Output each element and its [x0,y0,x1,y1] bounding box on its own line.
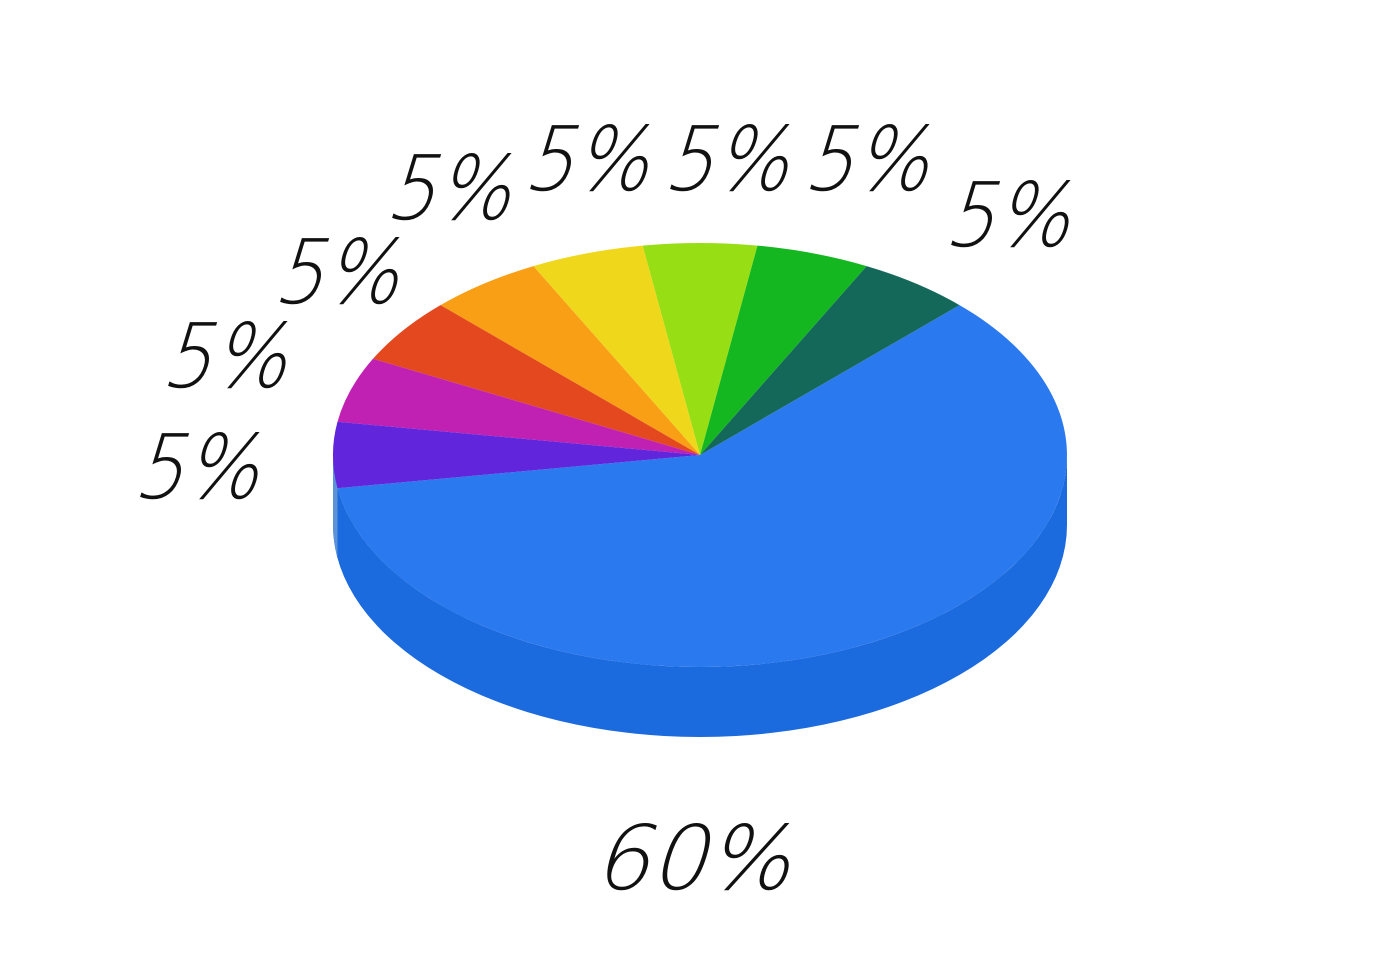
slice: purple [333,422,700,488]
label: red slice 5%: 5% [265,221,422,325]
label: magenta slice 5%: 5% [153,305,310,409]
side wall of the purple slice [333,455,338,558]
slice: yellow [533,246,700,455]
slice: 60% blue [338,305,1067,667]
label: purple slice 5%: 5% [125,416,282,520]
label: dark green slice 5%: 5% [936,164,1093,268]
slice: green [700,246,867,455]
slice: dark green [700,266,960,455]
label: green slice 5%: 5% [795,108,952,212]
slice: red [373,305,700,455]
side wall of the pie [333,455,1067,737]
slice: lime [643,243,757,455]
label: blue slice 60%: 60% [585,807,814,911]
slice: orange [440,266,700,455]
label: lime slice 5%: 5% [655,108,812,212]
label: yellow slice 5%: 5% [515,108,672,212]
pie chart [333,243,1067,737]
label: orange slice 5%: 5% [377,137,534,241]
slice: magenta [338,359,700,455]
